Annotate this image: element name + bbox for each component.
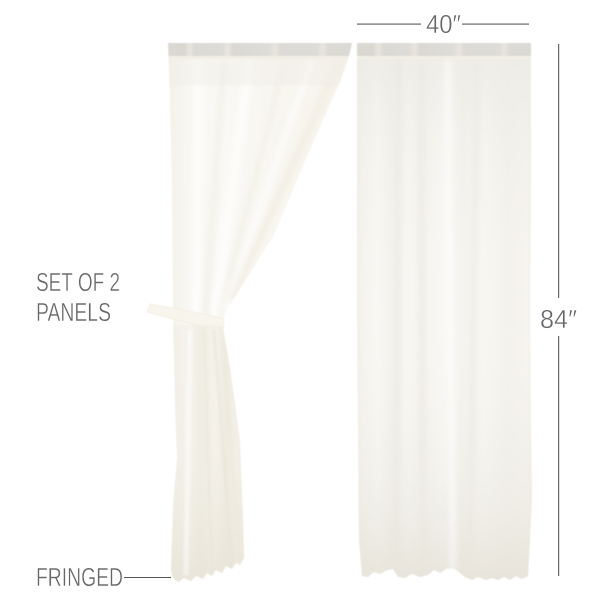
label: set of 2 panels: PANELS — [36, 297, 111, 327]
width dimension: 40 inches: 40″ — [426, 9, 461, 39]
height dimension: 84 inches: 84″ — [540, 304, 577, 334]
right curtain panel — [355, 40, 535, 585]
header band — [357, 43, 531, 56]
soft folds — [195, 86, 282, 311]
label: set of 2 panels — [36, 267, 120, 327]
label: set of 2 panels: SET OF 2 — [36, 267, 120, 297]
label: fringed with leader line: FRINGED — [36, 562, 123, 592]
header band — [165, 42, 355, 56]
left curtain panel, tied back — [147, 40, 355, 585]
tieback strap — [147, 304, 224, 327]
